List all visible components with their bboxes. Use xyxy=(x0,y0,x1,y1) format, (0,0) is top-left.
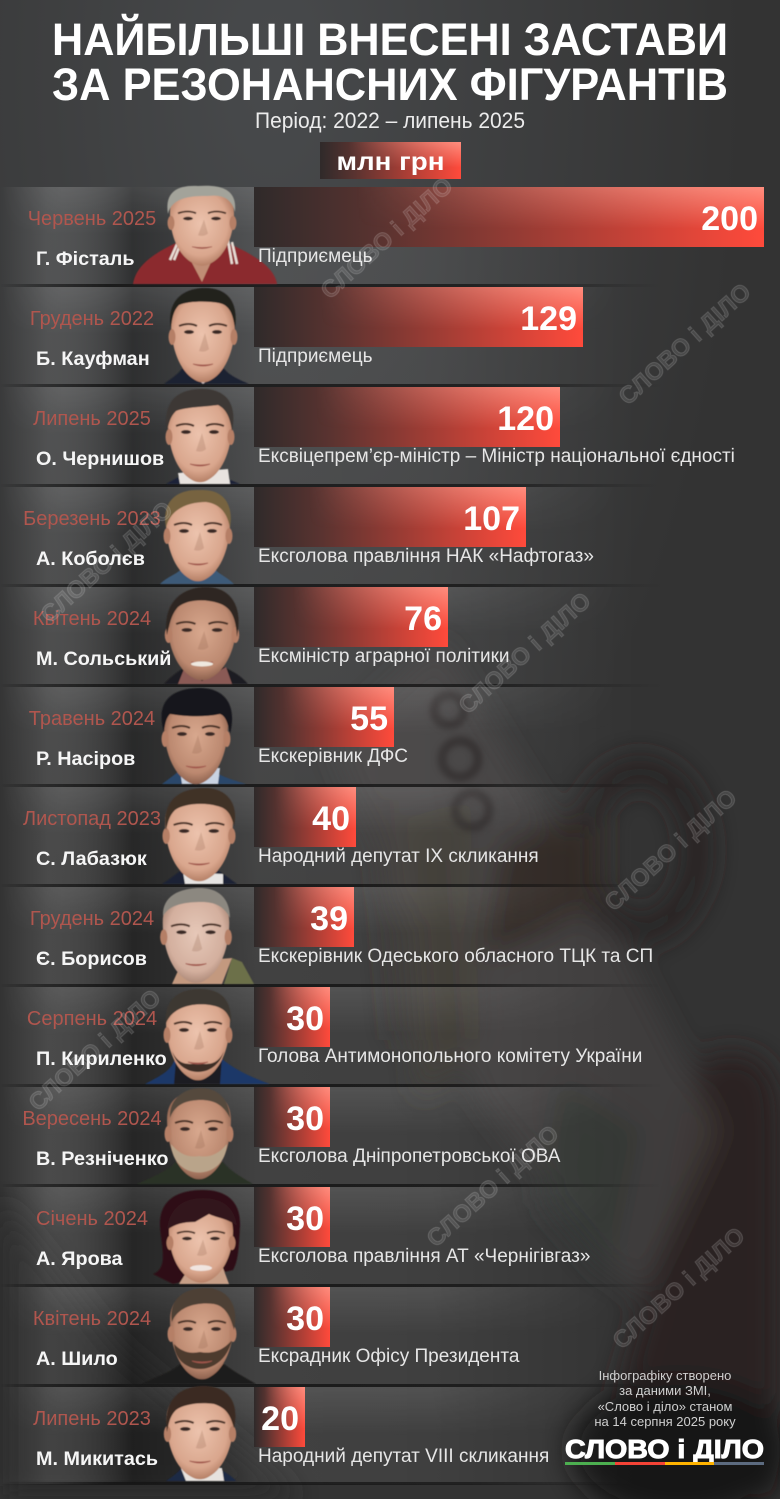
portrait xyxy=(133,186,277,284)
portrait xyxy=(162,688,246,784)
row: Ярова xyxy=(12,1187,590,1287)
row: Микитась xyxy=(11,1386,573,1485)
date: Грудень 2022 xyxy=(30,308,154,330)
watermarks xyxy=(24,172,756,1355)
portrait xyxy=(166,389,240,484)
bar 20: 20 xyxy=(261,1400,299,1438)
name: Р. Насіров xyxy=(36,748,135,770)
bar 30 xyxy=(254,987,330,1047)
row: Резніченко xyxy=(12,1087,596,1187)
role: Підприємець xyxy=(258,246,373,267)
unit label: млн грн xyxy=(336,148,444,176)
bar 39 xyxy=(254,887,354,947)
watermarks: СЛОВО і ДІЛО xyxy=(36,496,178,629)
date: Квітень 2024 xyxy=(33,1308,151,1330)
watermarks: СЛОВО і ДІЛО xyxy=(454,587,596,720)
role: Ексголова правління НАК «Нафтогаз» xyxy=(258,546,594,567)
portrait xyxy=(160,888,254,984)
name: В. Резніченко xyxy=(36,1148,168,1170)
portrait xyxy=(162,788,237,884)
bar 76 xyxy=(254,587,448,647)
name: А. Коболєв xyxy=(36,548,145,570)
bar 40: 40 xyxy=(312,800,350,838)
name: А. Шило xyxy=(36,1348,118,1370)
portrait xyxy=(164,288,249,384)
bar 107 xyxy=(254,487,526,547)
bar 20 xyxy=(254,1387,305,1447)
role: Ексголова Дніпропетровської ОВА xyxy=(258,1146,561,1167)
name: О. Чернишов xyxy=(36,448,164,470)
bar 30: 30 xyxy=(286,1100,324,1138)
credits: Інфографіку створено xyxy=(599,1368,731,1383)
role: Народний депутат ІХ скликання xyxy=(258,846,539,867)
date: Липень 2023 xyxy=(33,1408,151,1430)
bar 30 xyxy=(254,1287,330,1347)
watermarks: СЛОВО і ДІЛО xyxy=(422,1120,564,1253)
bar 55 xyxy=(254,687,394,747)
bar 30: 30 xyxy=(286,1300,324,1338)
row: Кауфман xyxy=(12,287,598,387)
bar 120: 120 xyxy=(497,400,554,438)
date: Липень 2025 xyxy=(33,408,151,430)
row: Борисов xyxy=(12,887,652,987)
bar 120 xyxy=(254,387,560,447)
bar 55: 55 xyxy=(350,700,388,738)
portrait xyxy=(153,1190,240,1284)
date: Січень 2024 xyxy=(36,1208,148,1230)
role: Голова Антимонопольного комітету України xyxy=(258,1046,642,1067)
credits xyxy=(594,1368,736,1429)
bar 30 xyxy=(254,1087,330,1147)
role: Ексголова правління АТ «Чернігівгаз» xyxy=(258,1246,590,1267)
name: Б. Кауфман xyxy=(36,348,150,370)
name: Є. Борисов xyxy=(36,948,147,970)
role: Екскерівник Одеського обласного ТЦК та СП xyxy=(258,946,653,967)
bar 200: 200 xyxy=(701,200,758,238)
portrait xyxy=(164,587,248,684)
bar 40 xyxy=(254,787,356,847)
name: М. Микитась xyxy=(36,1448,158,1470)
role: Ексвіцепрем’єр-міністр – Міністр національної єдності xyxy=(258,446,735,467)
name: П. Кириленко xyxy=(36,1048,167,1070)
role: Екскерівник ДФС xyxy=(258,746,408,767)
role: Народний депутат VIII скликання xyxy=(258,1446,549,1467)
bar 129 xyxy=(254,287,583,347)
row: Насіров xyxy=(12,687,578,787)
bar 200 xyxy=(254,187,764,247)
title xyxy=(52,14,728,110)
name: М. Сольський xyxy=(36,648,171,670)
date: Грудень 2024 xyxy=(30,908,154,930)
watermarks: СЛОВО і ДІЛО xyxy=(316,172,458,305)
bar 129: 129 xyxy=(520,300,577,338)
bar 30: 30 xyxy=(286,1200,324,1238)
watermarks: СЛОВО і ДІЛО xyxy=(24,984,166,1117)
row: Фісталь xyxy=(0,186,780,287)
watermarks: СЛОВО і ДІЛО xyxy=(600,784,742,917)
row: Чернишов xyxy=(0,387,780,487)
logo: Слово і діло: СЛОВО і ДІЛО xyxy=(565,1434,764,1464)
role: Підприємець xyxy=(258,346,373,367)
role: Ексміністр аграрної політики xyxy=(258,646,510,667)
date: Вересень 2024 xyxy=(22,1108,162,1130)
date: Серпень 2024 xyxy=(27,1008,157,1030)
portrait xyxy=(164,1386,236,1481)
row: Сольський xyxy=(12,587,590,687)
name: Г. Фісталь xyxy=(36,248,135,270)
name: А. Ярова xyxy=(36,1248,124,1270)
watermarks: СЛОВО і ДІЛО xyxy=(608,1222,750,1355)
role: Ексрадник Офісу Президента xyxy=(258,1346,520,1367)
bar 30 xyxy=(254,1187,330,1247)
subtitle: period: Період: 2022 – липень 2025 xyxy=(255,108,525,133)
credits: за даними ЗМІ, xyxy=(619,1383,711,1398)
unit label xyxy=(320,142,461,179)
portrait xyxy=(160,490,234,584)
bar 30: 30 xyxy=(286,1000,324,1038)
portrait xyxy=(142,1288,256,1384)
credits: «Слово і діло» станом xyxy=(598,1399,732,1414)
date: Листопад 2023 xyxy=(23,808,161,830)
bar 76: 76 xyxy=(404,600,442,638)
bar 39: 39 xyxy=(310,900,348,938)
bar 107: 107 xyxy=(463,500,520,538)
row: Шило xyxy=(11,1287,582,1387)
row: Коболєв xyxy=(12,487,594,587)
date: Червень 2025 xyxy=(28,208,156,230)
row: Лабазюк xyxy=(12,787,580,887)
date: Березень 2023 xyxy=(23,508,161,530)
row: Кириленко xyxy=(12,987,642,1087)
date: Квітень 2024 xyxy=(33,608,151,630)
name: С. Лабазюк xyxy=(36,848,147,870)
portrait xyxy=(137,1088,253,1184)
date: Травень 2024 xyxy=(29,708,155,730)
title: ЗА РЕЗОНАНСНИХ ФІГУРАНТІВ xyxy=(52,59,728,110)
portrait xyxy=(145,989,270,1084)
credits: на 14 серпня 2025 року xyxy=(594,1414,736,1429)
title: НАЙБІЛЬШІ ВНЕСЕНІ ЗАСТАВИ xyxy=(52,14,728,65)
watermarks: СЛОВО і ДІЛО xyxy=(614,278,756,411)
